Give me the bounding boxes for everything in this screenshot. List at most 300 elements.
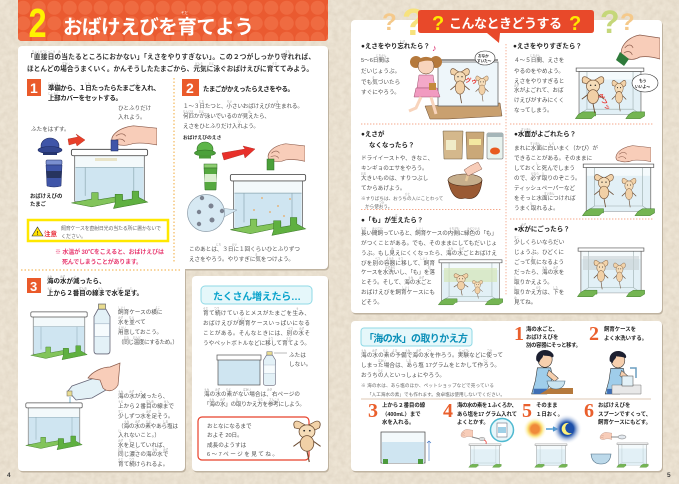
item: water surface dirty: しておくと死んでしまう (514, 165, 575, 172)
header banner: そだ (181, 10, 188, 15)
step 1 heading: にち (85, 82, 91, 86)
item: too much food: にちかん (530, 54, 541, 58)
tank (469, 444, 501, 467)
callout: growth: およそ 20日。 (207, 432, 243, 439)
item: forgot food: ●えさをやり忘れたら？ (361, 41, 430, 50)
tank with level arrow (381, 432, 431, 464)
step 2 text: ちい (227, 100, 233, 104)
step 1 heading (48, 82, 160, 102)
procedure step 5: そのまま (536, 402, 558, 409)
step 2 text (183, 100, 303, 130)
pouring text: うみ (124, 420, 130, 424)
item: out of food: なくなったら？ (369, 140, 414, 149)
item: cloudy water: うみ (542, 266, 548, 270)
item: too much food: ４～５日間、えさを (514, 57, 564, 64)
intro text: およ (209, 62, 215, 66)
item: cloudy water: ごって気になるよう (514, 258, 564, 266)
callout: growth: おとなになるまで (207, 423, 252, 430)
warning text: 死んでしまうことがあります。 (62, 258, 142, 266)
body text: う (296, 306, 299, 310)
body text: そだ (203, 306, 209, 310)
heading pill (361, 328, 472, 346)
heading speech bubble (418, 10, 594, 43)
item: cloudy water: みず (553, 266, 559, 270)
pouring text: みず (135, 420, 141, 424)
item: cloudy water: みず (521, 222, 527, 226)
step 1 heading: い (136, 82, 139, 86)
instruction text: ※ 海の水は、あら塩のほか、ペットショップなどで売っている (361, 382, 494, 389)
procedure step 1: 海の水ごと、 (526, 325, 558, 333)
item: out of food: つか (379, 200, 385, 204)
callout: growth: 成長のようすは (207, 441, 247, 449)
step 3 heading: うえ (47, 286, 53, 290)
hand with spoon (461, 429, 486, 444)
step 1 heading: 上部カバーをセットする。 (48, 93, 122, 102)
tank (617, 443, 648, 467)
item: water surface dirty: しろ (549, 142, 555, 146)
item: cloudy water: かた (536, 286, 542, 290)
hand with tissue (616, 146, 651, 162)
item: algae: うぶ。もし見えにくくなったら、海の水ごとおばけえ (361, 249, 497, 257)
intro text: ちょくせつにっこう (32, 50, 56, 54)
caution box: 飼育ケースを直射日光の当たる所に置かないで (61, 225, 161, 232)
instruction text: ひと (378, 368, 384, 372)
step 2 follow-up text: にち (216, 242, 222, 246)
intro text: ばあい (62, 62, 70, 66)
pouring text: た (158, 410, 161, 414)
step 1 badge: 1 (30, 80, 38, 96)
icon: red arrow (222, 146, 255, 160)
item: forgot food: にちかん (376, 54, 387, 58)
item: algae: うつ (398, 256, 404, 260)
instruction text: うみ (361, 348, 367, 352)
pouring text: そだ (118, 458, 124, 462)
caution box: ください。 (61, 233, 86, 240)
egg label: たまご (30, 200, 47, 208)
side-by-side text: みず (118, 316, 124, 320)
instruction text: つく (483, 358, 488, 362)
instruction text: 「人工海水の素」でも作れます。食卓塩は使用しないでください。 (367, 391, 505, 398)
item: algae: がつくことがある。でも、そのままにしてもだいじょ (361, 239, 497, 247)
heading pill: 「海の水」の取りかえ方 (364, 332, 468, 345)
item: cloudy water: だったら、海の水を (514, 268, 564, 276)
tank and bottle (31, 304, 110, 360)
salt package inset (490, 418, 514, 442)
decorative question marks: ? (382, 9, 397, 36)
icon: food jar (204, 164, 217, 190)
step 3 heading: た (130, 286, 133, 290)
item: forgot food: すぐにやろう。 (361, 88, 400, 96)
item: cloudy water: と (514, 286, 517, 290)
reference text: さんこう (269, 398, 280, 402)
step 2: おばけえびのえさ (183, 134, 222, 141)
item: water surface dirty: ティッシュペーパーなど (514, 184, 576, 192)
callout: growth (198, 417, 321, 462)
icon: hand with jar (111, 126, 157, 151)
side-by-side text: おな (124, 336, 130, 340)
step 2 (182, 79, 306, 263)
item: too much food: けえびがすみにくく (514, 96, 564, 104)
step 3 heading: 海の水が減ったら、 (47, 276, 106, 285)
intro text (27, 50, 315, 73)
item: too much food: 水がよごれて、おば (514, 86, 564, 94)
procedure step 4: 4 (443, 400, 453, 422)
speech bubble: enough: もう (639, 78, 647, 83)
character: girl (409, 56, 442, 114)
side-by-side text: よこ (155, 306, 161, 310)
dotted dividers (173, 78, 175, 263)
procedure step 2: よく水洗いする。 (604, 334, 647, 342)
item: out of food: ●えさが (361, 129, 385, 138)
body text: しいく (238, 316, 246, 320)
item: algae: おばけえびを飼育ケースにも (361, 288, 435, 296)
item: forgot food: でも気づいたら (361, 78, 400, 86)
step 2 follow-up text: えさをやろう。やりすぎに気をつけよう。 (189, 255, 294, 263)
step 3 heading: へ (74, 274, 77, 278)
item: algae (361, 214, 503, 306)
caution box: ! (37, 231, 39, 237)
step 2 badge: 2 (186, 80, 194, 96)
cloudy tank (577, 248, 645, 297)
step 2 text: １～３日たつと、小さいおばけえびが生まれる。 (183, 102, 303, 110)
step 2 follow-up text (189, 242, 300, 263)
item: water surface dirty: うまく取れるよ。 (514, 205, 559, 212)
item: out of food (361, 129, 503, 210)
pouring bottle and hand (67, 363, 120, 412)
speech bubble: enough (632, 74, 658, 92)
tank with eggs (71, 149, 148, 208)
item: cloudy water: 取りかえよう。 (514, 279, 553, 286)
tank with algae (438, 260, 503, 305)
page number 5: 5 (667, 472, 671, 479)
item: cloudy water: 見てね。 (514, 299, 536, 306)
intro text: まも (285, 50, 291, 54)
side-by-side text: 用意しておこう。 (118, 328, 162, 336)
body text: ことがある。そんなときには、別の水そ (203, 329, 310, 337)
item: out of food: おお (361, 172, 367, 176)
item: algae: しいく (420, 256, 428, 260)
step 3 badge (27, 278, 41, 294)
reference text: みず (220, 398, 226, 402)
pouring text: おな (118, 448, 124, 452)
item: water surface dirty: すいめん (530, 142, 541, 146)
pouring text: せん (164, 400, 170, 404)
header banner (18, 0, 328, 46)
pouring text: い (118, 430, 121, 432)
procedure step 4: あら塩を17 グラム入れて (457, 410, 517, 418)
step 1 heading: じゅんび (48, 82, 59, 86)
reference text (204, 388, 305, 408)
side-by-side text: （同じ温度にするため。） (118, 338, 178, 346)
procedure step 5: 5 (522, 400, 532, 422)
tank with shrimp (582, 164, 654, 216)
side-by-side text: 飼育ケースの横に (118, 308, 163, 316)
step 2 follow-up text: かい (232, 242, 238, 246)
tank with shrimp (438, 60, 498, 106)
procedure step 1: 別の容器にそっと移す。 (526, 341, 581, 349)
reference text: みぎ (267, 388, 273, 392)
item: cloudy water: 少しくらいならだい (514, 238, 565, 246)
item: too much food (513, 35, 660, 119)
step 3 (26, 274, 178, 468)
speech bubble: hungry (475, 51, 495, 65)
item: water surface dirty: すいめん (544, 192, 555, 196)
pouring text: みず (129, 390, 135, 394)
procedure step 2 (589, 323, 647, 394)
item: algae: なが (361, 226, 367, 230)
item: algae: ●「も」が生えたら？ (361, 215, 423, 224)
intro text: 「直接日の当たるところにおかない」「えさをやりすぎない」。この２つがしっかり守れれば、 (27, 52, 315, 61)
reference text: ばあい (243, 388, 251, 392)
item: algae: か (380, 226, 383, 230)
step 2 heading: たまごがかえったらえさをやる。 (203, 84, 294, 93)
instruction text: ばあい (378, 358, 386, 362)
item: water surface dirty: ので、必ず取りのぞこう。 (514, 174, 581, 182)
step 2 text: う (276, 100, 279, 104)
procedure step 4: 海の水の素を１ふくろか、 (457, 401, 517, 409)
pouring text: 同じ濃さの海の水で (118, 450, 169, 458)
reference text: うみ (209, 398, 215, 402)
step 2 text: み (248, 110, 251, 114)
item: algae: びを別の容器に移して、飼育 (361, 259, 435, 267)
procedure step 3: 3 (368, 400, 378, 422)
side-by-side text: おんど (133, 336, 141, 340)
step 1 notes: ひとふりだけ (118, 105, 152, 112)
item: algae: み (391, 246, 394, 250)
item: algae: べつ (375, 256, 381, 260)
reference text: かた (258, 398, 264, 402)
pouring text: 入れないこと。） (118, 432, 160, 439)
item: water surface dirty: し (536, 162, 539, 166)
boy washing tank (605, 351, 641, 394)
procedure step 1: 1 (514, 323, 524, 345)
step 1 heading: 準備から、１日たったらたまごを入れ、 (48, 83, 160, 92)
caution box: 注意 (44, 229, 58, 238)
heading speech bubble: ? (569, 13, 581, 35)
step 2 text: にち (199, 100, 205, 104)
body text: おばけえびが飼育ケースいっぱいになる (203, 319, 310, 327)
panel: when it multiplies (192, 276, 329, 472)
magnifier circle of larvae (188, 194, 237, 232)
tank being filled (26, 403, 82, 450)
step 3 heading: 上から２番目の線まで水を足す。 (47, 288, 143, 297)
item: algae: 長い間飼っていると、飼育ケースの内側に緑色の「も」 (361, 229, 497, 237)
item: algae: あいだ (372, 226, 380, 230)
item: algae: どそう。 (361, 298, 383, 306)
pouring text: うみ (152, 448, 158, 452)
item: algae: とそう。そして、海の水ごと (361, 278, 432, 286)
icon: music note: ♪ (432, 43, 436, 53)
step 2 text: およ (199, 110, 205, 114)
decorative question marks: ? (402, 2, 425, 44)
item: water surface dirty: ●水面がよごれたら？ (514, 129, 576, 138)
procedure step 3 (368, 400, 431, 464)
pouring text: すこ (118, 410, 124, 414)
warning text (55, 248, 164, 266)
item: algae: みどりいろ (467, 226, 480, 230)
step 2 follow-up text: き (255, 252, 258, 256)
intro text: げんき (195, 62, 203, 66)
item: cloudy water: き (531, 256, 534, 260)
heading pill (201, 286, 312, 304)
procedure step 4: よくとかす。 (457, 419, 489, 426)
pouring text (118, 390, 178, 468)
item: water surface dirty: をそっと水面につければ (514, 194, 576, 202)
body text: うやペットボトルなどに移して育てよう。 (203, 339, 310, 347)
pouring text: た (129, 438, 132, 442)
step 1 notes (31, 105, 152, 133)
panel: troubleshooting (351, 2, 663, 314)
icon: hand with food jar (267, 144, 305, 170)
item: too much food: えさをやりすぎると (514, 77, 564, 85)
step 2 text: 何匹かが泳いでいるのが見えたら、 (183, 112, 270, 120)
item: water surface dirty: まれに水面に白いまく（かび）が (514, 144, 598, 152)
pouring text: うみ (118, 390, 124, 394)
step 2 text: い (238, 120, 241, 124)
pouring text: 少しずつ水を足そう。 (118, 412, 174, 420)
dotted dividers (361, 44, 654, 295)
tank with shrimp: グゥ (465, 76, 478, 86)
instruction text: 海の水の素の予備で海の水を作ろう。実験などに使って (361, 351, 503, 359)
step 1 (27, 79, 168, 266)
item: forgot food: だいじょうぶ。 (361, 68, 400, 75)
icon: egg jar (46, 160, 62, 187)
procedure step 2: 2 (589, 323, 599, 345)
instruction text: しお (406, 358, 412, 362)
item: water surface dirty: かなら (531, 172, 539, 176)
step 3 badge: 3 (30, 279, 37, 294)
tank with hatchlings (230, 174, 306, 235)
warning text: ※ 水温が 30℃をこえると、おばけえびは (55, 248, 164, 256)
desk (425, 103, 502, 119)
food packages (443, 131, 503, 159)
speech bubble: hungry: おなか (478, 53, 489, 58)
page title: おばけえびを育てよう (63, 16, 254, 38)
item: algae: ようき (386, 256, 394, 260)
pouring text: （海の水の素やあら塩は (118, 422, 178, 430)
pouring text: へ (140, 390, 143, 394)
instruction text: つく (427, 348, 432, 352)
instruction text: よび (392, 348, 398, 352)
item: out of food: ドライイーストや、きなこ、 (361, 154, 433, 162)
pouring text: みず (163, 448, 169, 452)
step 1 notes: ふたをはずす。 (31, 125, 70, 133)
caution box (28, 220, 168, 241)
divider (361, 398, 651, 400)
bowl (591, 454, 611, 464)
step 3 heading: みず (60, 274, 66, 278)
panel: changing seawater (351, 321, 663, 472)
item: forgot food: わす (400, 40, 406, 44)
lid note (289, 352, 311, 368)
hand with spoon (600, 432, 626, 440)
side-by-side text: しいく (118, 306, 126, 310)
item: water surface dirty: と (542, 172, 545, 176)
icon: red arrow (68, 134, 85, 146)
procedure step 6: 6 (584, 400, 594, 422)
instruction text: うみ (405, 348, 411, 352)
item: cloudy water: した (553, 286, 559, 290)
step 3 heading (47, 274, 143, 297)
decorative question marks: ? (620, 9, 635, 36)
decorative question marks: ? (600, 4, 620, 40)
item: algae: みず (419, 276, 425, 280)
small tank and bottle (217, 352, 287, 385)
tank with shrimp: ゲフッ (596, 92, 612, 112)
section number: 2 (28, 1, 47, 46)
pouring text: みず (146, 410, 152, 414)
pouring text: みず (118, 438, 124, 442)
item: cloudy water (514, 222, 645, 306)
step 3 heading: せん (98, 286, 104, 290)
item: out of food: てからあげよう。 (361, 184, 405, 192)
body text (203, 306, 310, 347)
step 1 badge (27, 79, 41, 96)
intro text: あ (58, 50, 61, 54)
procedure step 5 (522, 400, 582, 467)
icon: green lid (194, 142, 216, 158)
item: out of food: 大きいものは、すりつぶし (361, 174, 429, 182)
item: out of food: ひと (405, 192, 411, 196)
procedure step 3: 上から２番目の線 (382, 401, 426, 409)
icon: sun to moon (523, 414, 582, 444)
item: algae: お (428, 266, 431, 270)
step 2 badge (182, 79, 199, 96)
step 3 heading: みず (117, 286, 123, 290)
character: shrimp (293, 421, 321, 462)
pouring text: こ (135, 448, 138, 452)
item: algae: うみ (408, 276, 414, 280)
procedure step 3: （400mL）まで (382, 411, 421, 418)
item: algae: ケースを水洗いし、「も」を落 (361, 268, 435, 276)
decorative question marks (382, 2, 635, 44)
boy transferring shrimp (532, 350, 573, 394)
heading speech bubble: こんなときどうする (449, 16, 562, 31)
procedure step 5: １日おく。 (536, 411, 563, 418)
tank with shrimp (575, 68, 645, 119)
instruction text: みず (416, 348, 422, 352)
item: out of food: ※すりばちは、おうちの人にことわって (361, 195, 444, 202)
speech bubble: hungry: すいた～ (477, 58, 492, 63)
pouring text: 上から２番目の線まで (118, 402, 174, 410)
instruction text: つか (487, 348, 493, 352)
procedure step 1: おばけえびを (526, 333, 558, 341)
side-by-side text: 水を並べて (118, 318, 146, 326)
icon: hand with jar (616, 35, 660, 66)
reference text: 海の水の素がない場合は、右ページの (204, 390, 300, 398)
side-by-side text: なら (129, 316, 135, 320)
procedure step 2: 飼育ケースを (604, 325, 636, 333)
intro text: そだ (272, 62, 278, 66)
heading pill: たくさん増えたら… (213, 290, 301, 303)
item: algae: みず (459, 246, 465, 250)
item: too much food: やるのをやめよう。 (514, 67, 564, 75)
tank (535, 444, 567, 467)
lid note: ふたは (289, 352, 306, 359)
item: algae: は (395, 214, 398, 218)
reference text: うみ (204, 388, 210, 392)
instruction text: みず (372, 348, 378, 352)
egg label: おばけえびの (30, 192, 62, 200)
procedure step 6: おばけえびを (598, 401, 630, 409)
reference text: みず (215, 388, 221, 392)
instruction text: もと (383, 348, 389, 352)
item: cloudy water: ●水がにごったら？ (514, 224, 570, 233)
item: forgot food: き (372, 76, 375, 80)
pouring text: ばんめ (146, 400, 154, 404)
item: cloudy water: と (514, 276, 517, 280)
pouring text: しお (163, 420, 169, 424)
